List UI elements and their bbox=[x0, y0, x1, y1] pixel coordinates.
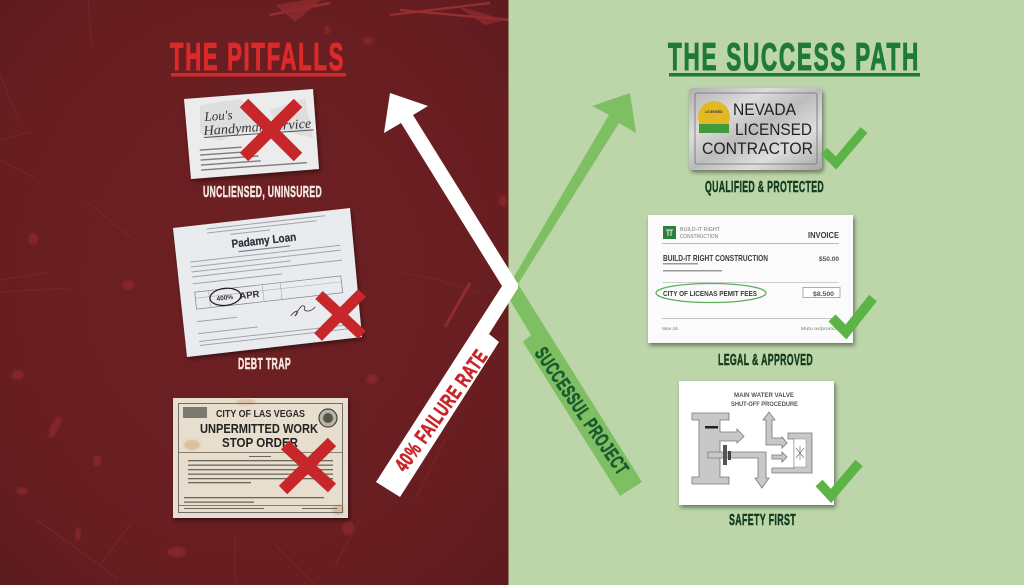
card: nevada licensed contractor badge: LICENSED bbox=[705, 110, 723, 114]
card: invoice: BUILD-IT RIGHT bbox=[680, 227, 720, 233]
card: invoice: Mutu ov/promo bbox=[801, 326, 836, 332]
card: stop order notice bbox=[173, 398, 348, 518]
card: invoice: CONSTRUCTION bbox=[680, 234, 718, 240]
panel: pitfalls background bbox=[0, 0, 510, 585]
card: payday loan document: APR bbox=[239, 289, 260, 302]
card: invoice: Name Job bbox=[662, 326, 678, 332]
card: nevada licensed contractor badge: LICENSED bbox=[735, 121, 812, 139]
label: qualified and protected: QUALIFIED & PROTECTED bbox=[705, 179, 824, 196]
card: invoice: $8.500 bbox=[813, 291, 834, 298]
heading: the pitfalls: THE PITFALLS bbox=[170, 36, 345, 79]
label: legal and approved: LEGAL & APPROVED bbox=[718, 352, 813, 369]
card: stop order notice: CITY OF LAS VEGAS bbox=[216, 409, 305, 420]
card: stop order notice: STOP ORDER bbox=[222, 436, 298, 450]
card: handyman business card: Handyman Service bbox=[202, 116, 312, 138]
card: payday loan document: 400% bbox=[216, 294, 234, 303]
card: nevada licensed contractor badge bbox=[689, 88, 864, 170]
icon: green check bbox=[824, 130, 864, 163]
card: water valve diagram: MAIN WATER VALVE bbox=[734, 392, 795, 399]
label: debt trap: DEBT TRAP bbox=[238, 356, 291, 373]
card: stop order notice: UNPERMITTED WORK bbox=[200, 422, 318, 436]
arrow label: 40% failure rate: 40% FAILURE RATE bbox=[390, 345, 493, 476]
card: water valve diagram: SHUT-OFF PROCEDURE bbox=[731, 401, 799, 408]
icon: green check bbox=[819, 463, 859, 496]
card: handyman business card bbox=[184, 89, 319, 179]
label: safety first: SAFETY FIRST bbox=[729, 512, 796, 529]
card: invoice: CITY OF LICENAS PEMIT FEES bbox=[663, 289, 757, 298]
arrow: white failure arrow bbox=[376, 93, 518, 497]
card: invoice: BUILD-IT RIGHT CONSTRUCTION bbox=[663, 253, 768, 263]
card: nevada licensed contractor badge: CONTRACTOR bbox=[702, 140, 813, 158]
arrow label: successful project: SUCCESSUL PROJECT bbox=[530, 343, 633, 479]
card: payday loan document bbox=[173, 208, 362, 357]
heading: the pitfalls bbox=[170, 36, 346, 79]
card: handyman business card: Lou's bbox=[203, 107, 233, 124]
icon: red x over loan bbox=[318, 293, 362, 337]
icon: green check bbox=[832, 298, 873, 332]
arrow: green success arrow bbox=[505, 93, 642, 496]
card: nevada licensed contractor badge: NEVADA bbox=[733, 101, 796, 119]
card: water valve diagram bbox=[679, 381, 859, 505]
card: payday loan document: Padamy Loan bbox=[231, 232, 297, 251]
card: invoice: $50.00 bbox=[819, 256, 839, 263]
panel: success path background bbox=[508, 0, 1024, 585]
label: unlicensed, uninsured: UNCLIENSED, UNINSURED bbox=[203, 184, 322, 201]
card: invoice: INVOICE bbox=[808, 231, 840, 240]
card: invoice bbox=[648, 215, 873, 343]
icon: red x over notice bbox=[283, 442, 332, 490]
icon: red x over card bbox=[244, 103, 298, 157]
